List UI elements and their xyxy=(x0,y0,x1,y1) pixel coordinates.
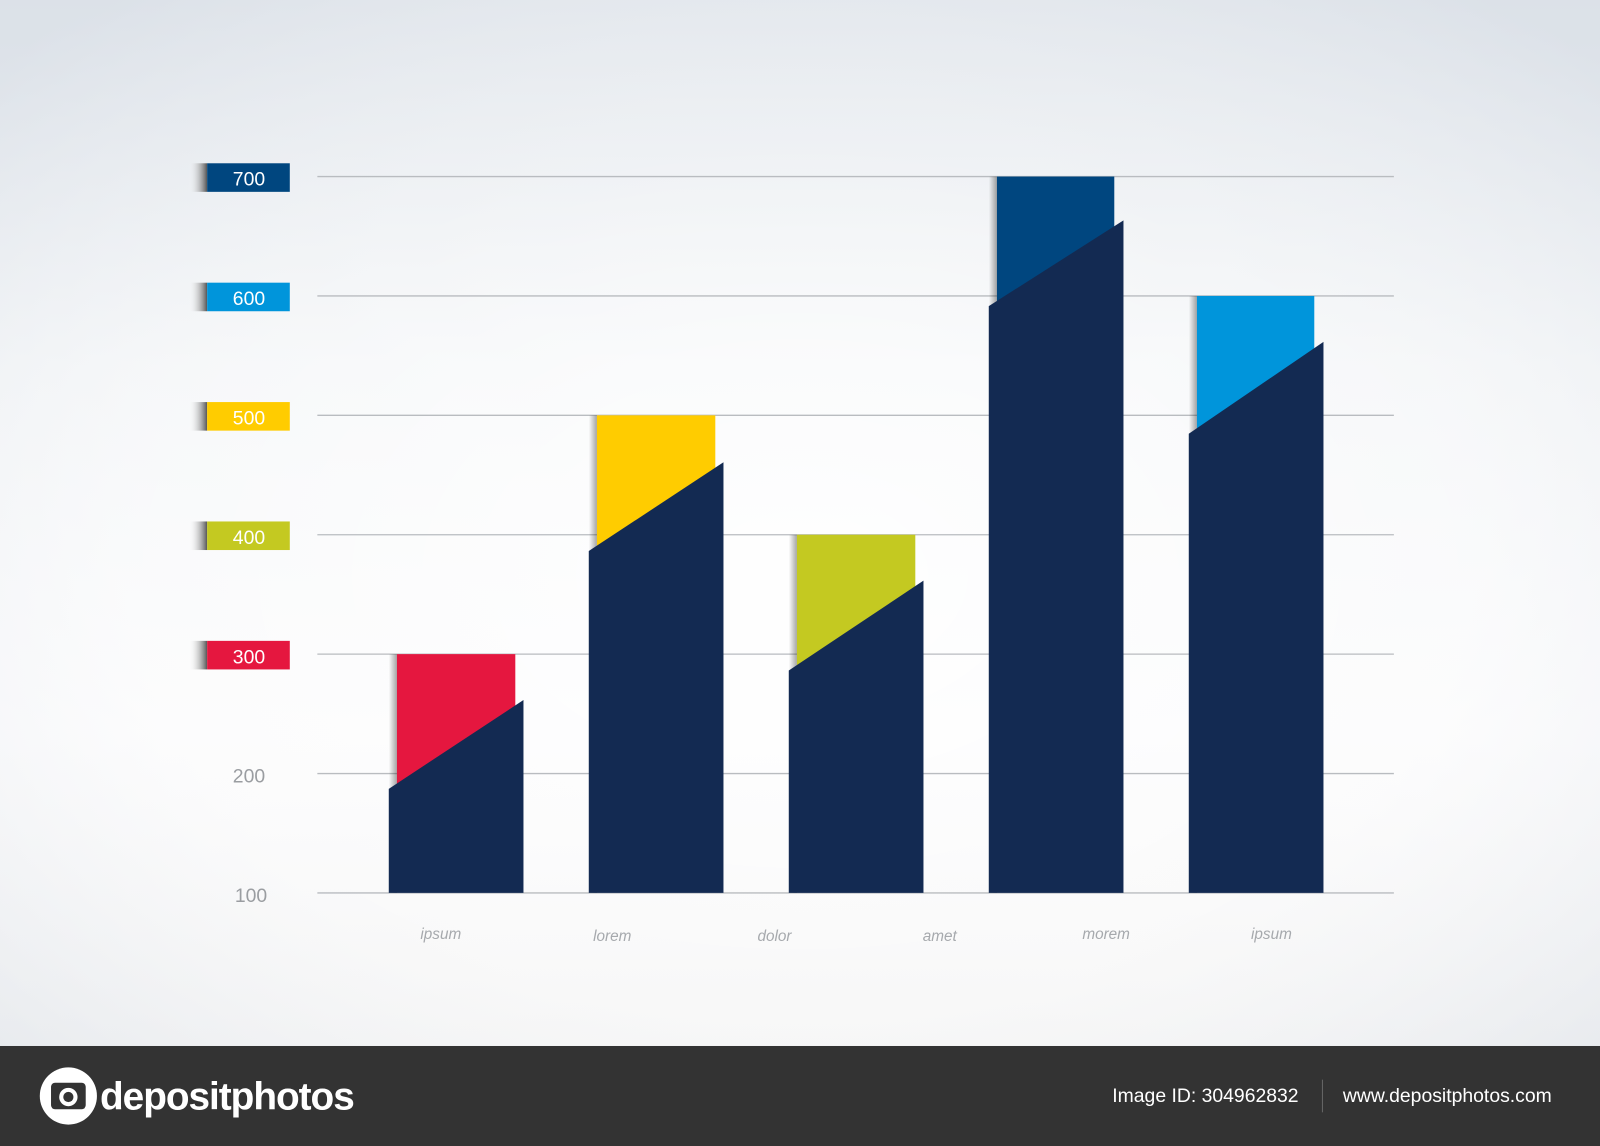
bar 5 ipsum xyxy=(1189,296,1323,893)
category labels: amet xyxy=(923,928,958,945)
category labels: ipsum xyxy=(1251,926,1292,943)
footer bar xyxy=(0,1046,1600,1146)
bar 4 morem xyxy=(989,177,1123,893)
category labels: morem xyxy=(1082,926,1130,943)
icon: camera logo xyxy=(40,1067,97,1125)
category labels xyxy=(420,926,1292,945)
bar 2 lorem xyxy=(589,415,723,893)
label 600 xyxy=(189,283,290,311)
label 200: 200 xyxy=(233,766,265,788)
grid lines xyxy=(317,177,1394,893)
label 700 xyxy=(189,163,290,192)
label 700: 700 xyxy=(233,169,265,191)
image id: Image ID: 304962832 xyxy=(1112,1085,1299,1107)
bar chart xyxy=(389,177,1323,893)
bar 1 ipsum xyxy=(389,654,523,893)
category labels: lorem xyxy=(593,928,632,945)
label 300 xyxy=(189,641,290,669)
category labels: ipsum xyxy=(420,926,461,943)
website url: www.depositphotos.com xyxy=(1342,1085,1552,1107)
label 500 xyxy=(189,402,290,431)
label 600: 600 xyxy=(233,288,265,310)
label 300: 300 xyxy=(233,646,265,668)
bar 3 dolor xyxy=(789,535,923,893)
label 500: 500 xyxy=(233,408,265,430)
category labels: dolor xyxy=(757,928,792,945)
label 400 xyxy=(189,521,290,550)
label 100: 100 xyxy=(235,885,267,907)
brand name: depositphotos xyxy=(100,1075,354,1118)
axis legend labels xyxy=(189,163,290,907)
label 400: 400 xyxy=(233,527,265,549)
